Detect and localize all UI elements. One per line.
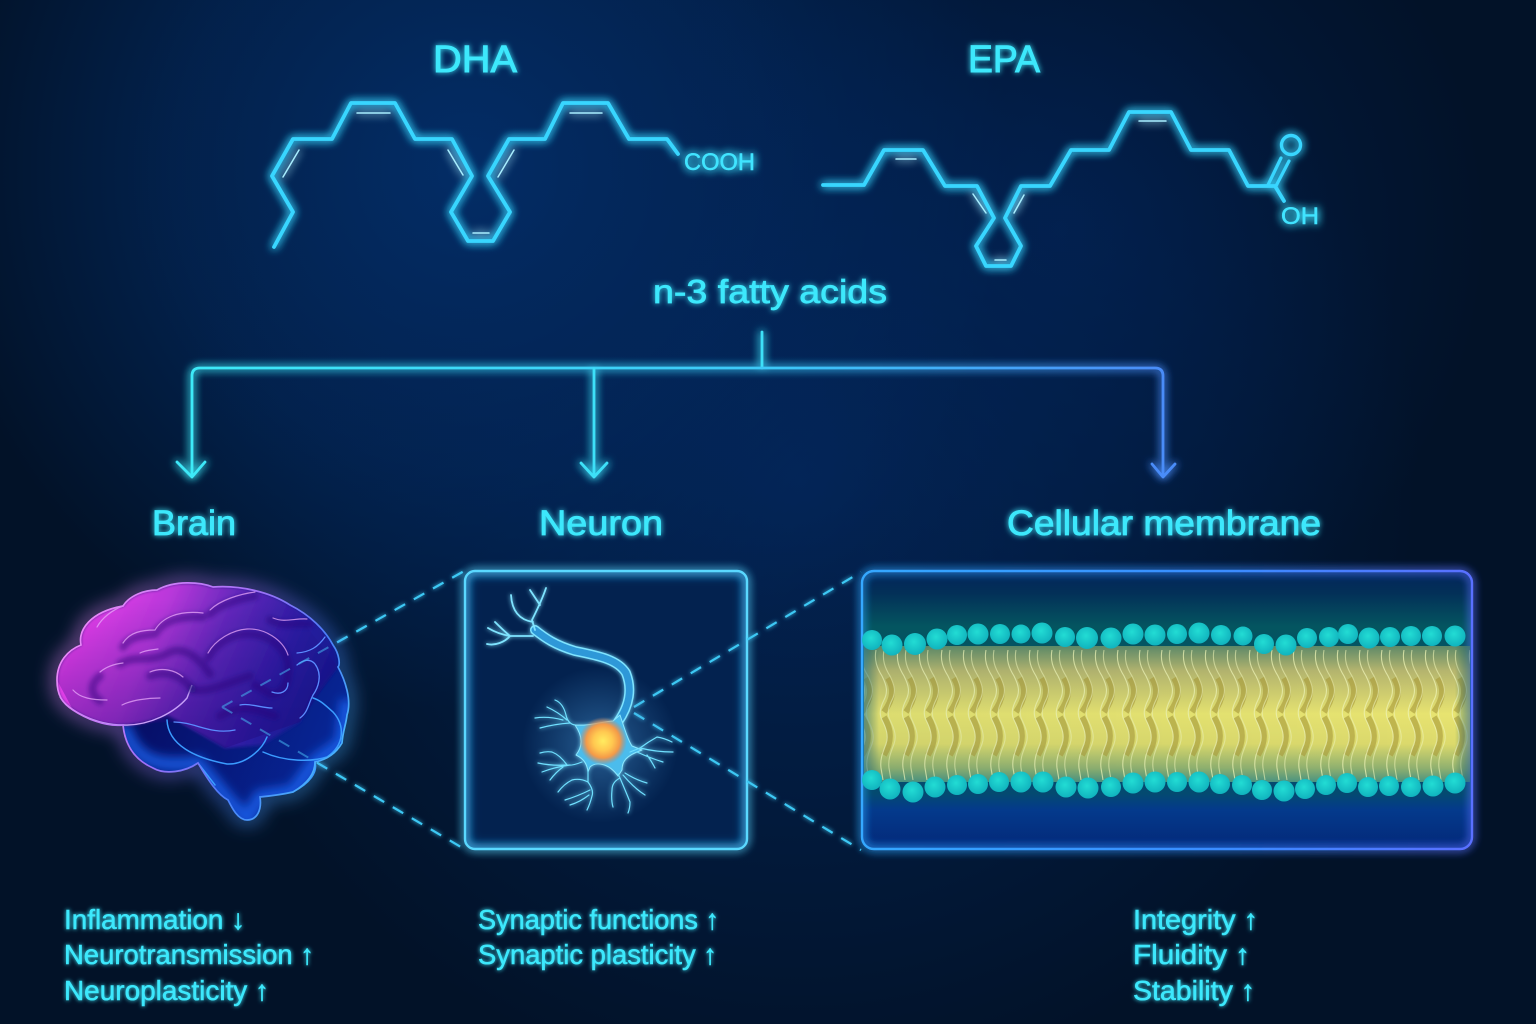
title: EPA: EPA: [968, 39, 1041, 81]
effects list: brain: Neurotransmission ↑: [64, 939, 314, 970]
title: DHA: DHA: [433, 39, 518, 81]
label: OH: OH: [1281, 203, 1319, 230]
lipid tails: [864, 646, 1470, 782]
heading: Cellular membrane: Cellular membrane: [1007, 504, 1321, 543]
heading: Brain: Brain: [152, 504, 236, 543]
effects list: neuron: [478, 904, 719, 970]
heading: Neuron: Neuron: [539, 504, 663, 543]
chemical structure: EPA: [823, 112, 1319, 266]
phospholipid heads: top row: [862, 622, 1466, 656]
dashed connector: brain to neuron box: [222, 570, 466, 850]
panel: neuron: [465, 571, 861, 850]
chemical structure: DHA: [272, 103, 755, 247]
icon: neuron cell: [487, 588, 678, 823]
effects list: cellular membrane: [1133, 904, 1258, 1006]
effects list: brain: [64, 904, 314, 1006]
effects list: brain: Neuroplasticity ↑: [64, 975, 269, 1006]
panel: cellular membrane: [862, 571, 1472, 849]
effects list: brain: Inflammation ↓: [64, 904, 245, 935]
phospholipid heads: bottom row: [862, 770, 1466, 802]
branching arrows: [177, 332, 1175, 477]
effects list: neuron: Synaptic plasticity ↑: [478, 939, 717, 970]
effects list: cellular membrane: Fluidity ↑: [1133, 939, 1250, 970]
heading: n-3 fatty acids: n-3 fatty acids: [653, 273, 887, 310]
icon: brain: [40, 566, 366, 836]
label: COOH: COOH: [684, 149, 755, 176]
effects list: neuron: Synaptic functions ↑: [478, 904, 719, 935]
effects list: cellular membrane: Stability ↑: [1133, 975, 1255, 1006]
dashed connector: neuron to membrane box: [634, 572, 861, 850]
effects list: cellular membrane: Integrity ↑: [1133, 904, 1258, 935]
